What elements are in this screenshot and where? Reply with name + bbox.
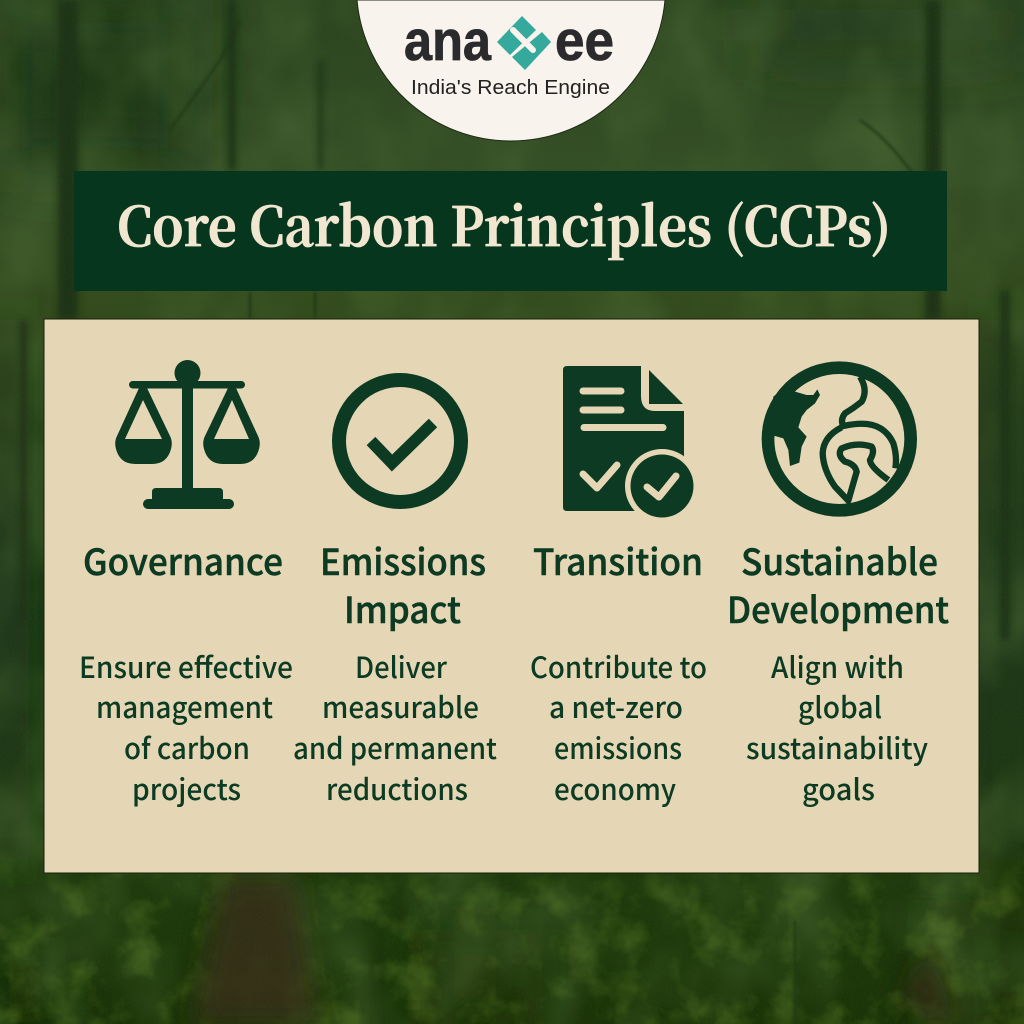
column: sustainable development — [727, 368, 949, 809]
column: transition — [530, 366, 707, 809]
description: sustainability — [746, 726, 928, 768]
logo mark — [497, 16, 551, 70]
description — [530, 645, 707, 809]
description: of carbon — [124, 726, 250, 768]
description: management — [96, 685, 273, 727]
column: governance — [79, 360, 293, 809]
icon: balance scales — [115, 360, 260, 509]
column: emissions impact — [293, 380, 497, 809]
heading — [727, 534, 949, 634]
logo wordmark right: ee — [555, 9, 614, 73]
heading — [320, 534, 486, 634]
description: Contribute to — [530, 645, 707, 687]
description — [293, 645, 497, 809]
logo tagline: India's Reach Engine — [411, 77, 610, 99]
description: global — [798, 685, 882, 727]
description: Deliver — [355, 645, 447, 687]
heading: Sustainable — [741, 534, 938, 586]
panel: principles — [44, 319, 979, 873]
heading: Development — [727, 582, 949, 634]
title banner — [74, 171, 947, 291]
heading: Impact — [344, 582, 461, 634]
logo badge — [357, 0, 665, 141]
description: and permanent — [293, 726, 497, 768]
heading: Emissions — [320, 534, 486, 586]
icon: globe — [768, 368, 911, 510]
description: measurable — [322, 685, 479, 727]
description: Align with — [771, 645, 904, 687]
heading: Governance — [83, 534, 283, 586]
title: Core Carbon Principles (CCPs) — [117, 185, 891, 262]
heading: Transition — [533, 534, 703, 586]
description: economy — [554, 767, 676, 809]
icon: check circle — [339, 380, 461, 502]
description — [746, 645, 928, 809]
description: Ensure effective — [79, 645, 293, 687]
description: goals — [802, 767, 875, 809]
description: a net-zero — [549, 685, 683, 727]
description: emissions — [554, 726, 682, 768]
description: reductions — [326, 767, 468, 809]
icon: document with check — [563, 366, 699, 523]
logo wordmark left: ana — [404, 9, 492, 73]
description: projects — [132, 767, 241, 809]
description — [79, 645, 293, 809]
